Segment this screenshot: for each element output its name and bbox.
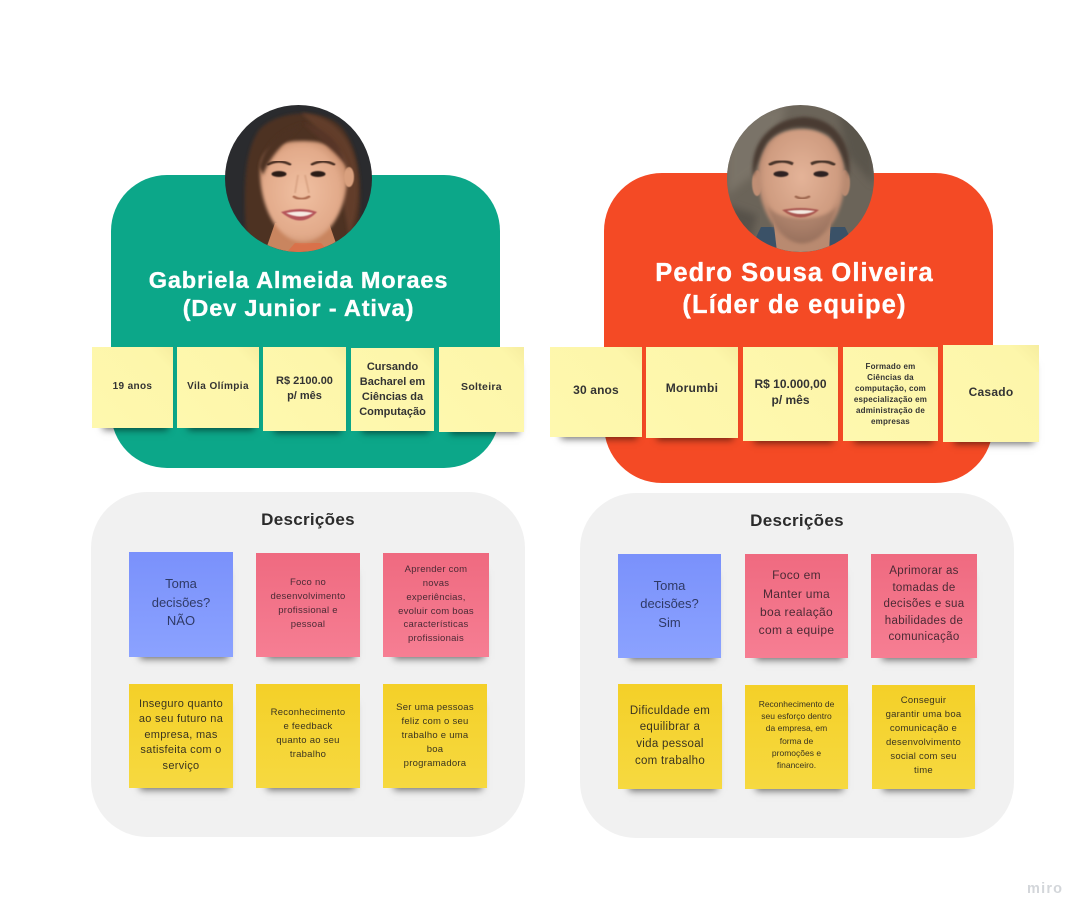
note: focus Pedro: com a equipe — [759, 623, 834, 637]
note: marital status Gabriela: Solteira — [461, 381, 502, 393]
heading: Gabriela descriptions: Descrições — [261, 510, 355, 529]
note: recognition Gabriela — [256, 684, 360, 788]
note: education Pedro: administração de — [856, 406, 925, 415]
note: focus Gabriela: pessoal — [291, 618, 325, 630]
note: decision making Pedro — [618, 554, 721, 658]
note: marital status Pedro: Casado — [969, 384, 1013, 398]
note: decision making Pedro: decisões? — [640, 596, 699, 611]
note: goals Gabriela: evoluir com boas — [398, 606, 474, 616]
note: wish Pedro: time — [914, 764, 933, 776]
note: recognition Pedro: financeiro. — [777, 760, 816, 770]
note: education Pedro: Ciências da — [867, 373, 914, 382]
note: insecurity Gabriela: empresa, mas — [144, 729, 218, 741]
note: wish Gabriela: feliz com o seu — [401, 716, 469, 726]
panel: Gabriela profile card — [111, 175, 500, 468]
note: decision making Gabriela: Toma — [165, 576, 197, 591]
title: Pedro name and role — [655, 259, 934, 319]
note: recognition Gabriela: Reconhecimento — [271, 707, 345, 718]
note: goals Gabriela: características — [404, 619, 468, 630]
note: work-life difficulty Pedro: vida pessoal — [636, 738, 704, 750]
note: wish Gabriela: programadora — [404, 758, 466, 768]
note: education Pedro: especialização em — [854, 395, 927, 404]
note: goals Gabriela: profissionais — [408, 633, 464, 644]
note: insecurity Gabriela: satisfeita com o — [140, 744, 222, 756]
note: location Pedro — [646, 347, 738, 438]
note: insecurity Gabriela: ao seu futuro na — [139, 713, 223, 725]
note: insecurity Gabriela: Inseguro quanto — [139, 698, 223, 710]
note: recognition Pedro: forma de — [780, 736, 813, 746]
note: decision making Pedro: Sim — [658, 615, 681, 630]
title: Gabriela name and role — [149, 267, 448, 322]
note: age Gabriela: 19 anos — [113, 380, 152, 392]
note: goals Pedro: Aprimorar as — [889, 565, 959, 577]
note: insecurity Gabriela: serviço — [163, 760, 199, 772]
note: salary Gabriela — [263, 347, 346, 431]
note: recognition Pedro: Reconhecimento de — [759, 699, 834, 709]
note: recognition Pedro: da empresa, em — [766, 723, 827, 733]
note: marital status Pedro — [943, 345, 1039, 442]
note: location Gabriela: Vila Olímpia — [187, 380, 249, 392]
note: recognition Pedro: seu esforço dentro — [761, 711, 832, 721]
note: education Pedro: empresas — [871, 417, 910, 426]
icon: Gabriela portrait — [225, 105, 372, 252]
note: wish Pedro: comunicação e — [890, 722, 957, 734]
note: focus Pedro — [745, 554, 848, 658]
note: recognition Gabriela: quanto ao seu — [276, 735, 340, 746]
note: goals Pedro: tomadas de — [892, 582, 956, 594]
note: education Pedro: computação, com — [855, 384, 926, 393]
note: education Gabriela: Cursando — [367, 360, 418, 372]
note: salary Pedro: R$ 10.000,00 — [754, 376, 827, 390]
note: wish Pedro: social com seu — [890, 750, 957, 762]
note: decision making Gabriela — [129, 552, 233, 657]
title: Pedro name and role: (Líder de equipe) — [682, 291, 907, 319]
note: recognition Gabriela: e feedback — [284, 721, 332, 732]
note: location Pedro: Morumbi — [666, 380, 718, 394]
title: Pedro name and role: Pedro Sousa Oliveira — [655, 259, 934, 287]
panel: Pedro descriptions — [580, 493, 1014, 838]
note: focus Gabriela: profissional e — [278, 604, 338, 616]
note: wish Gabriela — [383, 684, 487, 788]
note: focus Pedro: boa realação — [760, 605, 833, 619]
note: goals Pedro: habilidades de — [885, 615, 963, 627]
note: goals Pedro: decisões e sua — [884, 598, 964, 610]
note: focus Gabriela — [256, 553, 360, 657]
note: goals Gabriela: Aprender com — [405, 564, 467, 575]
note: salary Pedro — [743, 347, 838, 441]
note: marital status Gabriela — [439, 347, 524, 432]
note: work-life difficulty Pedro — [618, 684, 722, 789]
panel: Pedro profile card — [604, 173, 993, 483]
note: age Pedro: 30 anos — [573, 383, 619, 397]
note: wish Pedro: garantir uma boa — [886, 708, 961, 720]
note: goals Gabriela — [383, 553, 489, 657]
note: goals Gabriela: experiências, — [406, 592, 466, 603]
note: education Gabriela: Computação — [359, 406, 426, 418]
note: focus Pedro: Foco em — [772, 568, 821, 582]
note: wish Gabriela: Ser uma pessoas — [396, 702, 474, 712]
note: insecurity Gabriela — [129, 684, 233, 788]
note: focus Pedro: Manter uma — [763, 587, 830, 601]
note: goals Gabriela: novas — [423, 578, 449, 589]
logo: miro: miro — [1027, 881, 1063, 897]
note: work-life difficulty Pedro: com trabalho — [635, 755, 705, 767]
panel: Gabriela descriptions — [91, 492, 525, 837]
note: wish Gabriela: trabalho e uma — [402, 730, 468, 740]
note: decision making Gabriela: NÃO — [167, 613, 195, 628]
note: decision making Pedro: Toma — [654, 578, 685, 593]
note: wish Pedro: Conseguir — [901, 694, 946, 706]
note: age Gabriela — [92, 347, 173, 428]
note: work-life difficulty Pedro: Dificuldade em — [630, 705, 710, 717]
note: location Gabriela — [177, 347, 259, 428]
note: recognition Pedro: promoções e — [772, 748, 821, 758]
note: goals Pedro — [871, 554, 977, 658]
note: work-life difficulty Pedro: equilibrar a — [640, 721, 700, 733]
note: education Gabriela — [351, 348, 434, 431]
note: recognition Gabriela: trabalho — [290, 749, 326, 760]
title: Gabriela name and role: (Dev Junior - Ativa) — [183, 295, 414, 321]
title: Gabriela name and role: Gabriela Almeida Moraes — [149, 267, 448, 293]
note: age Pedro — [550, 347, 642, 437]
note: goals Pedro: comunicação — [888, 631, 960, 643]
icon: Pedro portrait — [727, 105, 874, 252]
heading: Pedro descriptions: Descrições — [750, 511, 844, 530]
note: education Gabriela: Ciências da — [362, 390, 423, 402]
note: education Pedro — [843, 347, 938, 441]
note: education Pedro: Formado em — [865, 362, 916, 371]
note: wish Pedro: desenvolvimento — [886, 736, 961, 748]
note: focus Gabriela: Foco no — [290, 576, 326, 588]
note: education Gabriela: Bacharel em — [360, 376, 425, 388]
note: decision making Gabriela: decisões? — [152, 595, 210, 610]
note: recognition Pedro — [745, 685, 848, 789]
note: focus Gabriela: desenvolvimento — [270, 590, 346, 602]
note: salary Gabriela: p/ mês — [287, 390, 322, 402]
note: salary Pedro: p/ mês — [771, 393, 810, 407]
note: wish Pedro — [872, 685, 975, 789]
note: salary Gabriela: R$ 2100.00 — [276, 375, 333, 387]
note: wish Gabriela: boa — [427, 744, 443, 754]
